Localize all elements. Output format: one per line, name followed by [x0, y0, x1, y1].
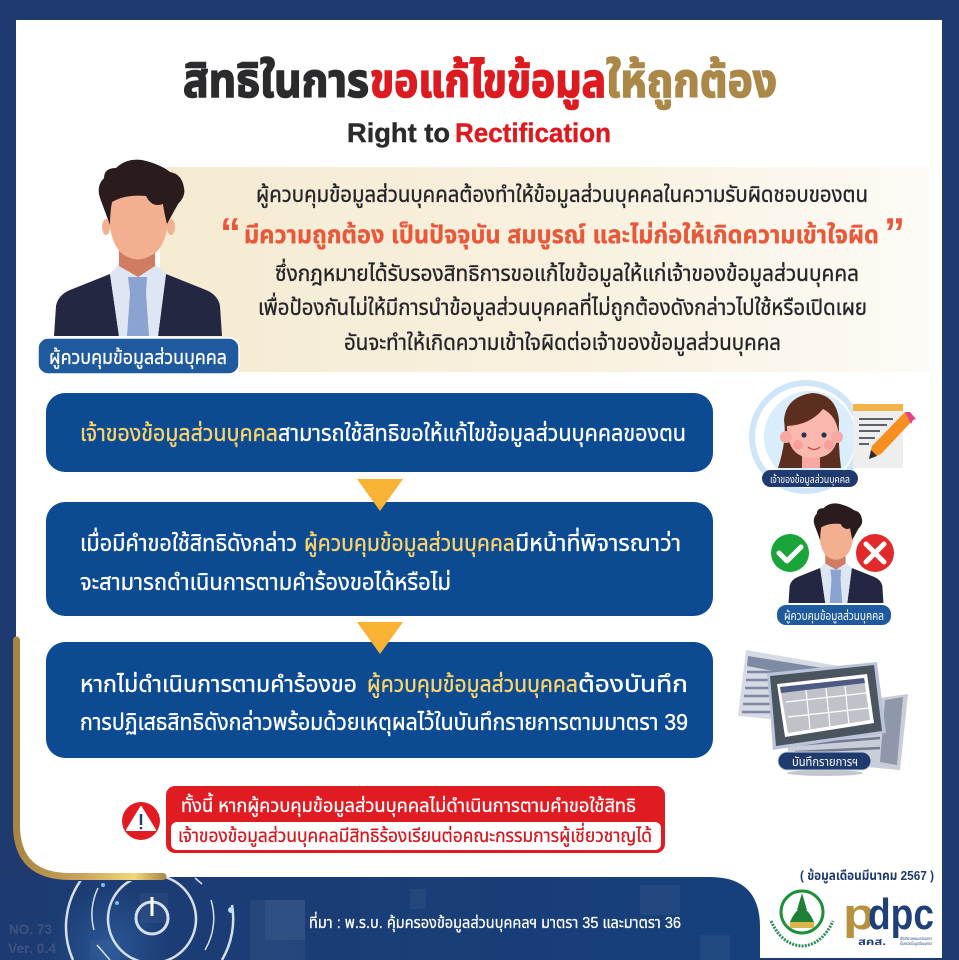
- logo: pdpc: [843, 890, 934, 948]
- logo: pdpc: สำนักงานคณะกรรมการ: [900, 936, 932, 941]
- text: highlighted quote: ”: [884, 209, 905, 256]
- panel: step 2: จะสามารถดำเนินการตามคำร้องขอได้หรือไม่: [80, 569, 451, 595]
- icon: controller with check and cross: ผู้ควบคุมข้อมูลส่วนบุคคล: [784, 609, 884, 623]
- text: definition line 5: อันจะทำให้เกิดความเข้าใจผิดต่อเจ้าของข้อมูลส่วนบุคคล: [344, 330, 781, 356]
- text: highlighted quote: มีความถูกต้อง เป็นปัจจุบัน สมบูรณ์ และไม่ก่อให้เกิดความเข้าใจผิด: [244, 221, 879, 250]
- icon: data subject woman: เจ้าของข้อมูลส่วนบุคคล: [770, 473, 850, 486]
- logo: pdpc: dpc: [868, 890, 934, 939]
- panel: step 3: ต้องบันทึก: [578, 671, 688, 697]
- callout: complaint right: [166, 786, 665, 853]
- subtitle: [347, 118, 611, 148]
- gold corner line: [16, 640, 163, 876]
- version note: Ver. 0.4: [8, 940, 56, 956]
- panel: step 2: [46, 502, 713, 616]
- logo: ministry emblem: [771, 891, 833, 946]
- icon: controller with check and cross: [771, 503, 894, 625]
- icon: records on tablet: [738, 650, 908, 776]
- icon: data controller person: [54, 160, 222, 336]
- logo: pdpc: p: [843, 890, 875, 939]
- panel: step 3: หากไม่ดำเนินการตามคำร้องขอ: [80, 671, 357, 697]
- label: data controller: ผู้ควบคุมข้อมูลส่วนบุคคล: [49, 346, 227, 370]
- icon: records on tablet: บันทึกรายการฯ: [792, 755, 858, 769]
- title: สิทธิในการ: [183, 54, 369, 107]
- panel: step 2: เมื่อมีคำขอใช้สิทธิดังกล่าว: [80, 527, 297, 556]
- callout: complaint right: เจ้าของข้อมูลส่วนบุคคลมีสิทธิร้องเรียนต่อคณะกรรมการผู้เชี่ยวชาญได้: [178, 822, 652, 848]
- text: definition line 3: ซึ่งกฎหมายได้รับรองสิทธิการขอแก้ไขข้อมูลให้แก่เจ้าของข้อมูลส่วนบุคคล: [275, 258, 859, 287]
- subtitle: Right to: [347, 118, 450, 148]
- icon: warning: [122, 802, 160, 840]
- panel: step 2: ผู้ควบคุมข้อมูลส่วนบุคคล: [304, 530, 515, 558]
- label: data controller: [38, 338, 239, 374]
- arrow: step 2 to 3: [357, 622, 403, 654]
- title: ให้ถูกต้อง: [606, 54, 777, 109]
- text: data date: ( ข้อมูลเดือนมีนาคม 2567 ): [800, 868, 934, 884]
- panel: step 3: [46, 642, 713, 758]
- logo: pdpc: คุ้มครองข้อมูลส่วนบุคคล: [900, 941, 932, 946]
- panel: step 2: มีหน้าที่พิจารณาว่า: [515, 527, 681, 556]
- icon: data subject woman: [752, 383, 916, 491]
- callout: complaint right: ทั้งนี้ หากผู้ควบคุมข้อมูลส่วนบุคคลไม่ดำเนินการตามคำขอใช้สิทธิ: [181, 792, 636, 818]
- panel: step 1: [46, 393, 713, 472]
- panel: step 3: ผู้ควบคุมข้อมูลส่วนบุคคล: [367, 671, 578, 699]
- text: source: ที่มา : พ.ร.บ. คุ้มครองข้อมูลส่วนบุคคลฯ มาตรา 35 และมาตรา 36: [309, 911, 681, 932]
- power icon decoration: [50, 875, 234, 960]
- text: highlighted quote: “: [220, 209, 241, 256]
- subtitle: Rectification: [455, 118, 611, 148]
- title: [183, 54, 777, 109]
- panel: definition: [160, 167, 930, 372]
- title: ขอแก้ไขข้อมูล: [370, 54, 606, 109]
- version note: [8, 921, 56, 956]
- footer band: [0, 877, 760, 960]
- panel: step 3: การปฏิเสธสิทธิดังกล่าวพร้อมด้วยเหตุผลไว้ในบันทึกรายการตามมาตรา 39: [80, 709, 688, 736]
- panel: step 1: สามารถใช้สิทธิขอให้แก้ไขข้อมูลส่วนบุคคลของตน: [278, 420, 686, 448]
- version note: NO. 73: [9, 921, 52, 937]
- panel: step 1: เจ้าของข้อมูลส่วนบุคคล: [80, 420, 278, 448]
- text: definition line 1: ผู้ควบคุมข้อมูลส่วนบุคคลต้องทำให้ข้อมูลส่วนบุคคลในความรับผิดชอบของตน: [256, 182, 868, 208]
- text: definition line 4: เพื่อป้องกันไม่ให้มีการนำข้อมูลส่วนบุคคลที่ไม่ถูกต้องดังกล่าวไปใช้หรือเปิดเผย: [258, 292, 867, 321]
- arrow: step 1 to 2: [357, 479, 403, 511]
- text: highlighted quote: [220, 209, 905, 256]
- logo: pdpc: สคส.: [858, 937, 886, 948]
